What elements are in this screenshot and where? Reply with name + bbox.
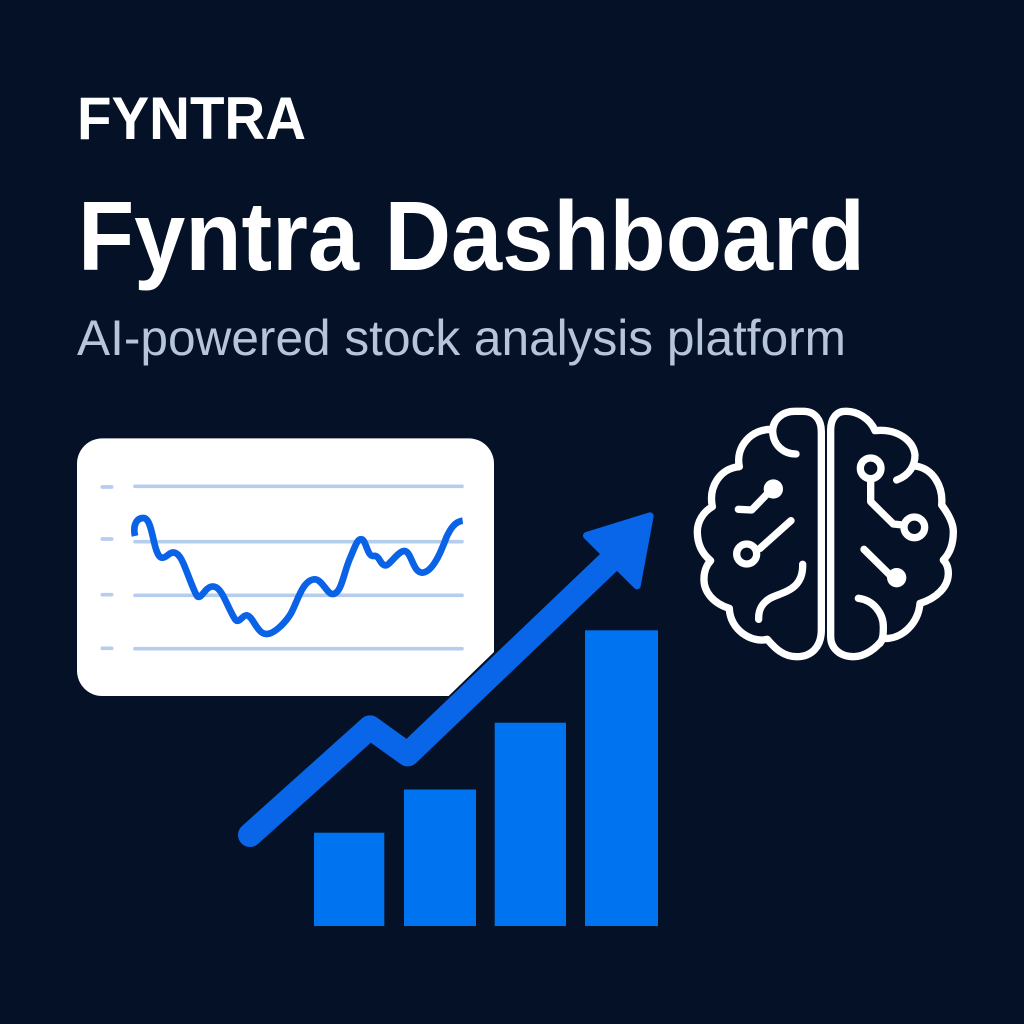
right circuit nodes xyxy=(858,458,925,643)
arrow: rising trend xyxy=(250,516,650,835)
panel: line chart card xyxy=(77,438,503,700)
logo wordmark: FYNTRA xyxy=(77,85,306,152)
icon: AI brain xyxy=(697,411,953,657)
bar chart xyxy=(314,630,658,926)
right hemisphere outline xyxy=(831,411,953,657)
chart line xyxy=(134,518,463,634)
left hemisphere outline xyxy=(697,411,821,657)
title: Fyntra Dashboard xyxy=(78,181,865,291)
left circuit nodes xyxy=(737,479,803,619)
subtitle: AI-powered stock analysis platform xyxy=(77,310,846,366)
